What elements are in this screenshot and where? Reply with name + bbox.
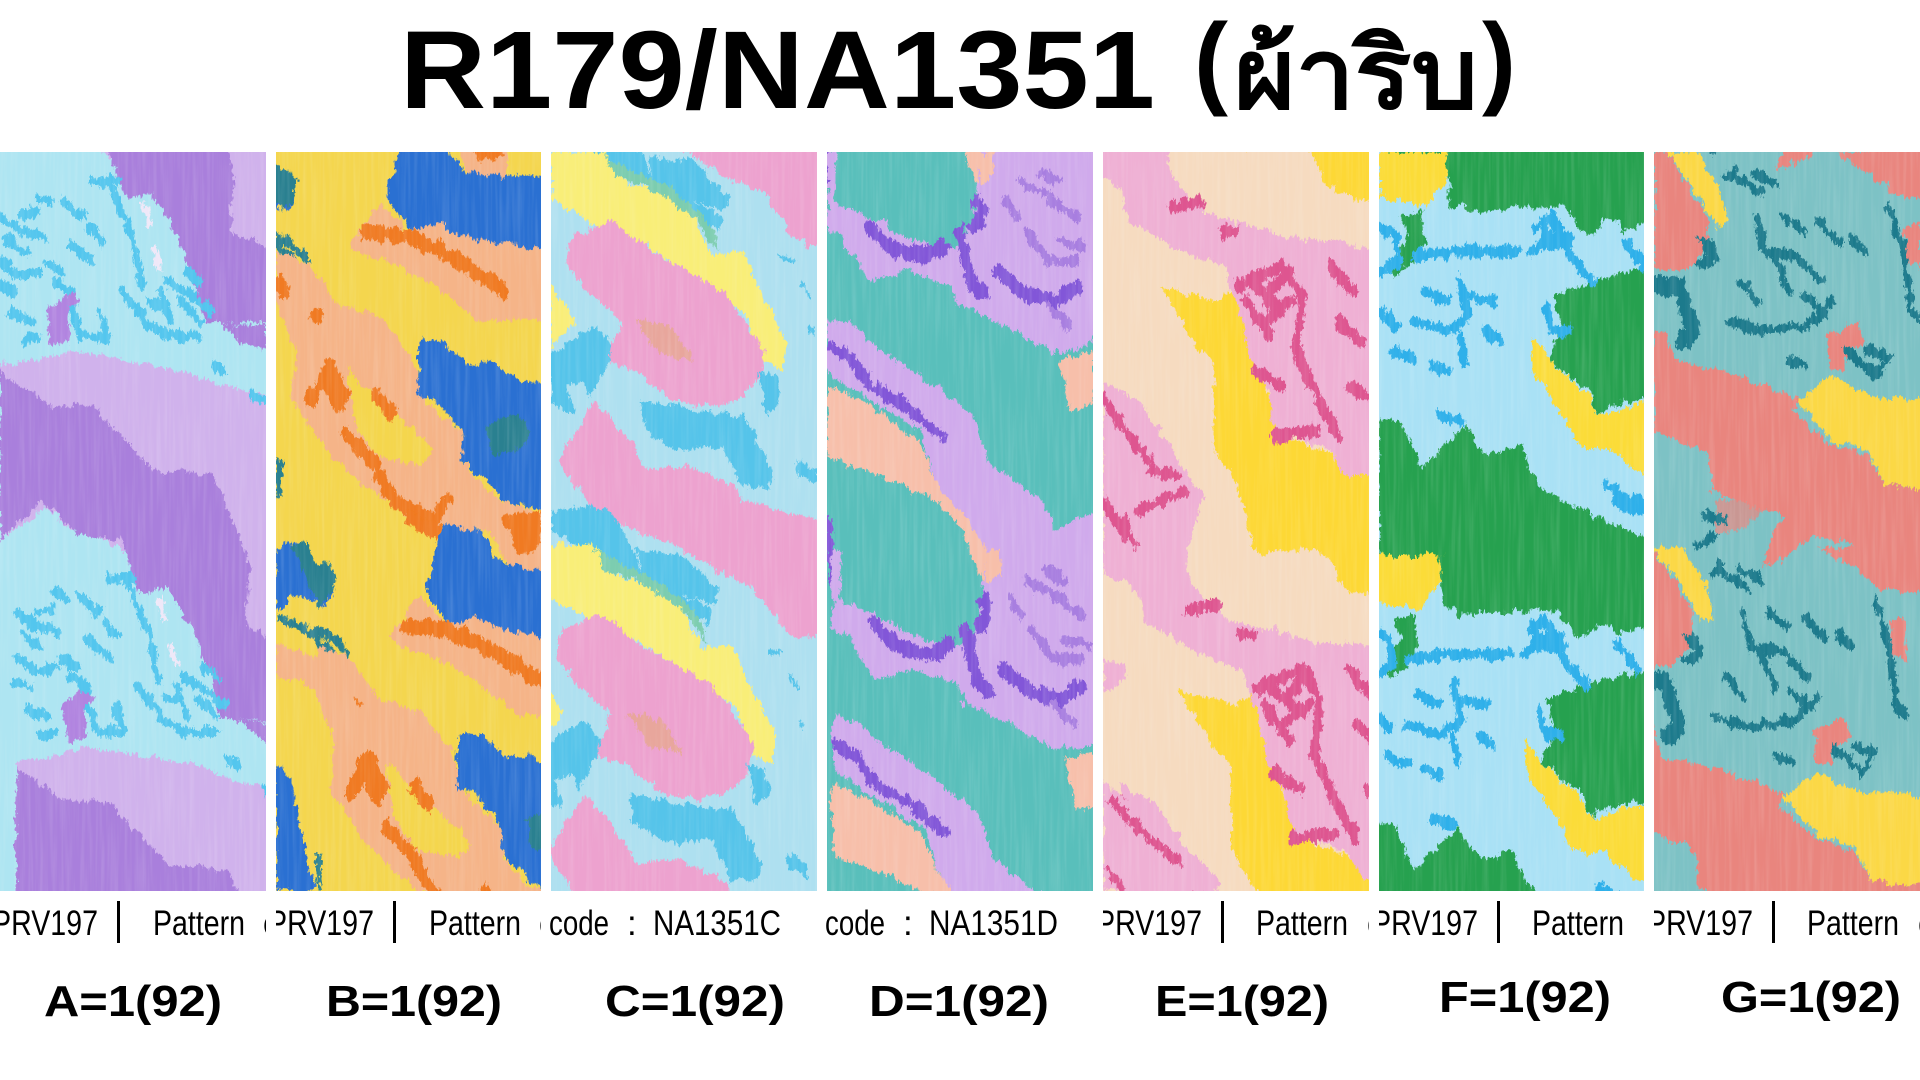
strip text: swatch C: NA1351C	[653, 904, 781, 943]
strip text: swatch B	[268, 901, 555, 943]
strip text: swatch G	[1647, 901, 1920, 943]
panel: fabric swatch F blue, green and yellow	[1379, 152, 1644, 891]
panel: fabric swatch G teal, salmon and yellow	[1654, 152, 1920, 891]
strip text: swatch E: PRV197	[1096, 904, 1202, 943]
quantity label B: B=1(92)	[326, 977, 502, 1026]
strip text: swatch F: c	[1643, 904, 1659, 943]
title: R179/NA1351	[400, 9, 1155, 132]
fabric rib texture	[0, 152, 1920, 891]
title: (	[1194, 2, 1229, 117]
strip text: swatch B: c	[539, 904, 555, 943]
strip text: swatch F: Pattern	[1532, 904, 1624, 943]
quantity label F: F=1(92)	[1439, 973, 1611, 1022]
quantity label D: D=1(92)	[869, 977, 1049, 1026]
panel: fabric swatch D teal, lilac and peach	[827, 152, 1093, 891]
panel: fabric swatch B yellow, orange and blue	[276, 152, 541, 891]
panel: fabric swatch C yellow, pink and blue	[551, 152, 817, 891]
quantity label A: A=1(92)	[44, 977, 222, 1026]
strip text: swatch G: Pattern	[1807, 904, 1899, 943]
title: )	[1482, 2, 1516, 117]
strip text: swatch D: NA1351D	[929, 904, 1058, 943]
strip text: swatch F	[1379, 901, 1622, 943]
strip text: swatch C: :	[627, 904, 637, 943]
strip text: swatch A	[0, 901, 279, 943]
strip text: swatch C	[550, 910, 780, 936]
panel: fabric swatch A purple and sky blue	[0, 152, 266, 891]
panel: fabric swatch E peach, pink and yellow	[1103, 152, 1369, 891]
quantity label C: C=1(92)	[605, 977, 785, 1026]
strip text: swatch B: Pattern	[429, 904, 521, 943]
strip text: swatch D: :	[903, 904, 913, 943]
strip text: swatch E: c	[1367, 904, 1383, 943]
strip text: swatch E	[1096, 901, 1383, 943]
strip text: swatch F: PRV197	[1372, 904, 1478, 943]
strip text: swatch B: PRV197	[268, 904, 374, 943]
quantity label G: G=1(92)	[1721, 973, 1901, 1022]
strip text: swatch G: PRV197	[1647, 904, 1753, 943]
quantity label E: E=1(92)	[1155, 977, 1329, 1026]
strip text: swatch D: code	[825, 904, 885, 943]
strip text: swatch E: Pattern	[1256, 904, 1348, 943]
title	[400, 2, 1516, 132]
strip text: swatch D	[826, 910, 1057, 936]
title: ผ้าริบ	[1234, 19, 1478, 129]
strip text: swatch C: code	[549, 904, 609, 943]
strip text: swatch A: Pattern	[153, 904, 245, 943]
strip text: swatch A: c	[263, 904, 279, 943]
